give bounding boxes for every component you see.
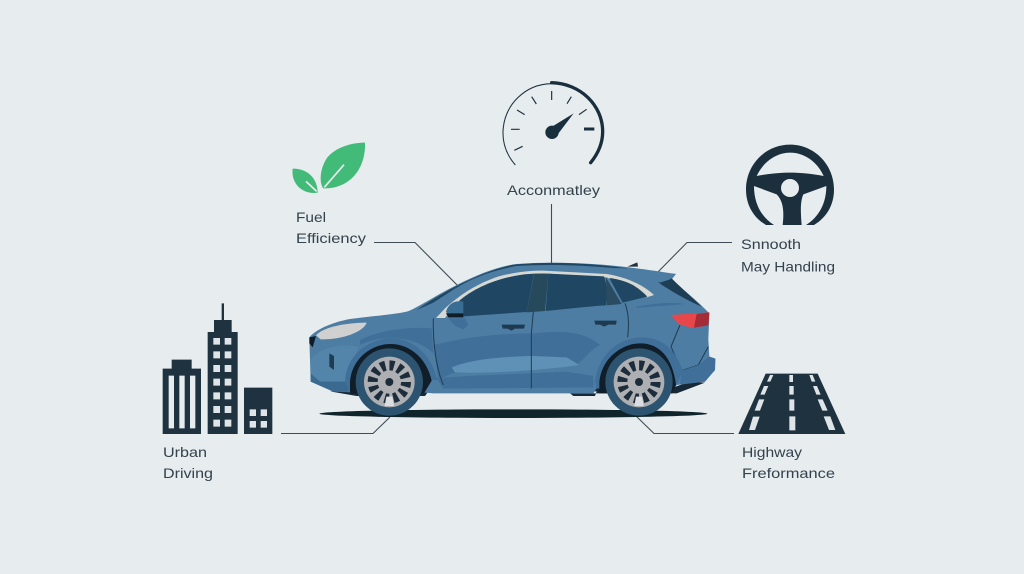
label: Highway Freformance bbox=[742, 444, 835, 481]
underbody bbox=[330, 382, 705, 396]
icon: green leaves bbox=[292, 143, 365, 193]
sill bbox=[437, 372, 593, 389]
rear roof spoiler fin bbox=[627, 262, 638, 267]
spoiler bbox=[654, 273, 676, 283]
front bumper vent bbox=[329, 353, 334, 370]
car body bbox=[309, 263, 715, 393]
label: Urban Driving bbox=[163, 444, 213, 481]
front fender highlight bbox=[360, 328, 433, 353]
rear body crease bbox=[637, 303, 685, 308]
car illustration bbox=[309, 262, 715, 418]
rear door window bbox=[546, 274, 607, 311]
label: Fuel Efficiency: Efficiency bbox=[296, 230, 366, 246]
label: Highway Freformance: Highway bbox=[742, 444, 802, 460]
grille bbox=[309, 336, 316, 347]
ground shadow bbox=[319, 409, 707, 418]
rear quarter pillar bbox=[606, 277, 622, 305]
front wheel arch bbox=[345, 338, 437, 393]
connector: fuel efficiency bbox=[374, 242, 465, 293]
rear bumper bbox=[680, 357, 715, 384]
label: Urban Driving: Urban bbox=[163, 444, 207, 460]
label: Smooth May Handling: Snnooth bbox=[741, 236, 801, 252]
label: Smooth May Handling: May Handling bbox=[741, 258, 835, 274]
side mirror bbox=[446, 301, 463, 316]
front bumper lower bbox=[311, 373, 348, 392]
door seams bbox=[433, 303, 708, 388]
mirror shadow bbox=[448, 318, 468, 329]
rear wheel arch bbox=[595, 337, 683, 388]
front door window bbox=[459, 274, 534, 317]
front bumper lighter panel bbox=[310, 345, 358, 382]
icon: speedometer gauge bbox=[503, 83, 603, 165]
roof rail bbox=[417, 263, 628, 310]
label: Urban Driving: Driving bbox=[163, 465, 213, 481]
icon: highway road bbox=[738, 374, 845, 434]
rear quarter window bbox=[609, 278, 647, 303]
icon: steering wheel bbox=[746, 145, 834, 225]
lower body shade bbox=[433, 332, 600, 380]
rear hatch glass bbox=[658, 278, 702, 307]
door pillar bbox=[527, 274, 548, 312]
window trim bbox=[436, 271, 654, 318]
icon: city buildings bbox=[163, 303, 272, 434]
connector: accuracy gauge bbox=[550, 204, 552, 266]
tail light bbox=[671, 312, 709, 328]
connector: highway performance bbox=[636, 416, 734, 434]
door handles bbox=[502, 321, 617, 331]
label: Smooth May Handling bbox=[741, 236, 835, 274]
connector: smooth handling bbox=[655, 242, 732, 275]
label: Acconmatley: Acconmatley bbox=[507, 182, 600, 198]
door highlight bbox=[452, 356, 579, 373]
label: Fuel Efficiency: Fuel bbox=[296, 209, 326, 225]
headlight bbox=[316, 323, 367, 339]
connector: urban driving bbox=[281, 417, 390, 434]
front wheel bbox=[356, 348, 423, 416]
rear wheel bbox=[605, 348, 673, 416]
label: Fuel Efficiency bbox=[296, 209, 366, 246]
label: Highway Freformance: Freformance bbox=[742, 465, 835, 481]
